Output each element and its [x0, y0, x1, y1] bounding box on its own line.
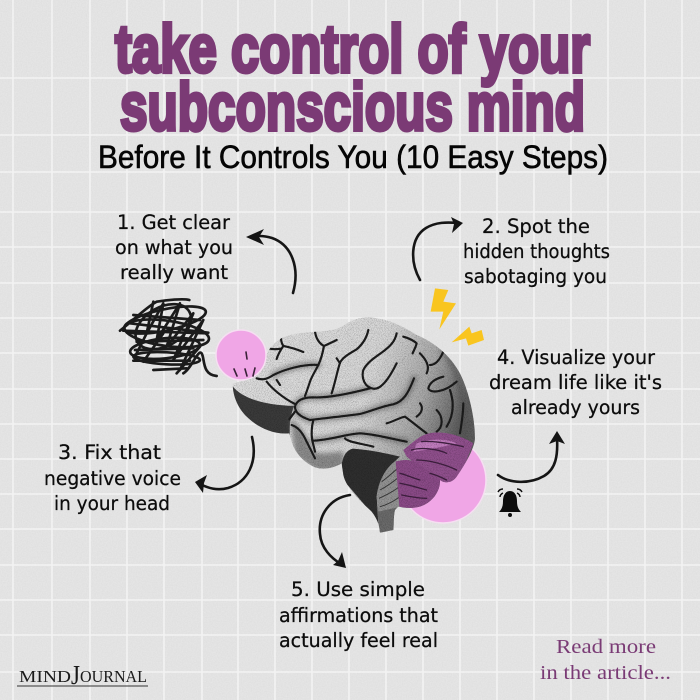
brainstem shadow: [342, 449, 400, 523]
arrow: step 4: [498, 431, 565, 482]
brainstem: [377, 507, 397, 535]
logo: OURNAL: [80, 667, 147, 686]
step 5 text: affirmations that: [279, 604, 438, 627]
occipital lobe tint: [403, 433, 473, 485]
brain grain: [233, 317, 475, 532]
step 2 text: sabotaging you: [464, 265, 607, 288]
read more note: in the article...: [540, 662, 671, 684]
step 1 text: 1. Get clear: [117, 211, 231, 234]
arrow: step 2: [413, 217, 463, 280]
read more note: [540, 636, 671, 684]
logo: J: [71, 660, 80, 690]
creases: [257, 330, 463, 458]
logo: [17, 660, 148, 690]
step 1 text: on what you: [115, 236, 233, 259]
step 4 text: 4. Visualize your: [497, 346, 656, 369]
step 1 text: really want: [120, 261, 228, 284]
pink highlight: [413, 440, 457, 452]
read more note: Read more: [556, 636, 656, 658]
icon: bell: [498, 489, 522, 517]
step 1 text: [115, 211, 233, 284]
step 2 text: [463, 215, 610, 288]
arrow: step 1: [246, 229, 295, 293]
crease shadows: [273, 350, 464, 443]
step 5 text: 5. Use simple: [291, 578, 425, 601]
step 4 text: dream life like it's: [489, 371, 662, 394]
cerebellum tint: [396, 460, 440, 508]
brain: [232, 317, 475, 533]
icon: lightning bolts: [431, 288, 484, 346]
subtitle: Before It Controls You (10 Easy Steps): [98, 139, 608, 175]
step 3 text: 3. Fix that: [58, 441, 161, 464]
logo: MIND: [19, 667, 71, 686]
step 2 text: hidden thoughts: [463, 240, 610, 263]
temporal lobe shading: [291, 418, 345, 472]
cerebellum grey part: [377, 460, 401, 512]
step 4 text: [489, 346, 662, 419]
step 3 text: [44, 441, 181, 515]
step 3 text: in your head: [54, 492, 170, 515]
arrow: step 3: [195, 437, 254, 493]
step 2 text: 2. Spot the: [482, 215, 590, 238]
step 5 text: actually feel real: [279, 629, 438, 652]
step 4 text: already yours: [511, 396, 640, 419]
scribble: [120, 295, 217, 376]
pink circle: front of brain: [216, 330, 266, 380]
brain silhouette: [233, 317, 475, 533]
step 3 text: negative voice: [44, 467, 181, 490]
pink circle: behind cerebellum: [400, 437, 486, 523]
title: [115, 11, 590, 145]
frontal underside shadow: [230, 385, 294, 437]
step 5 text: [279, 578, 438, 652]
arrow: step 5: [320, 495, 350, 568]
